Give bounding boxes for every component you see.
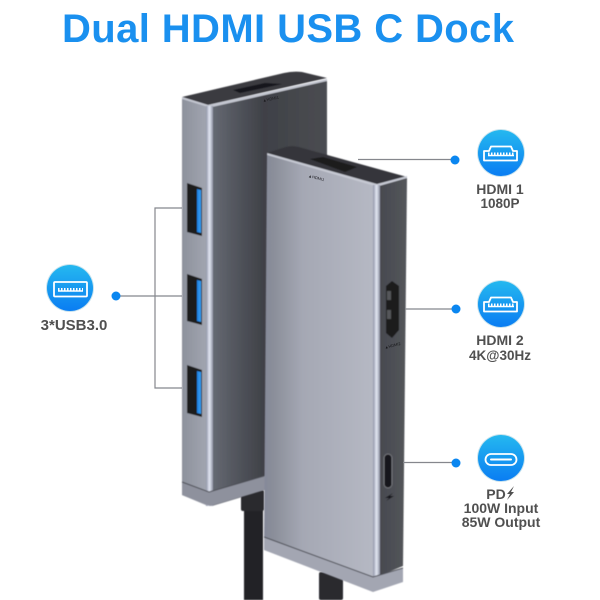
device: front dock: [264, 146, 407, 592]
device: back dock: [182, 72, 327, 506]
USB port 1: [187, 183, 202, 236]
connector: HDMI 2: [405, 304, 460, 314]
connector: HDMI 1: [358, 156, 460, 164]
USB port 3: [187, 365, 202, 417]
printed label: back HDMI: ▲HDMI1: [262, 95, 280, 103]
cable: front dock: [319, 572, 343, 600]
back dock HDMI opening: [233, 83, 282, 93]
HDMI 2 port: [386, 281, 399, 338]
front dock bottom band: [264, 537, 403, 592]
back dock dark face: [212, 81, 327, 506]
label: HDMI 2: HDMI 2: [476, 332, 524, 348]
label: HDMI 1: 1080P: [480, 196, 520, 211]
cable: back dock: [241, 490, 264, 600]
label: PD: 85W Output: [462, 514, 541, 530]
PD bolt mark: [385, 493, 394, 501]
label: PD: 100W Input: [464, 500, 539, 516]
label: PD: PD: [486, 486, 506, 502]
title: Dual HDMI USB C Dock: [62, 7, 515, 51]
back dock top face: [182, 72, 327, 105]
connector: PD: [403, 458, 460, 468]
icon: USB-C: [477, 434, 525, 482]
back dock bottom band: [182, 470, 285, 506]
front dock dark side: [379, 178, 407, 576]
label: USB: 3*USB3.0: [41, 317, 107, 334]
front dock HDMI opening: [310, 157, 357, 172]
connector: USB bracket: [112, 208, 182, 388]
back dock silver side: [182, 99, 208, 506]
label: HDMI 2: 4K@30Hz: [469, 348, 531, 363]
front dock top face: [267, 146, 407, 185]
USB-C port: [384, 454, 392, 488]
icon: HDMI 1: [477, 129, 525, 177]
front dock silver face: [264, 155, 375, 578]
label: PD: [462, 486, 541, 530]
icon: USB: [46, 264, 94, 312]
icon: HDMI 2: [477, 280, 525, 328]
label: HDMI 1: HDMI 1: [476, 181, 524, 197]
printed label: side HDMI: ▲HDMI2: [384, 341, 402, 350]
USB port 2: [187, 274, 202, 325]
printed label: front HDMI: ▲HDMI1: [308, 173, 326, 182]
